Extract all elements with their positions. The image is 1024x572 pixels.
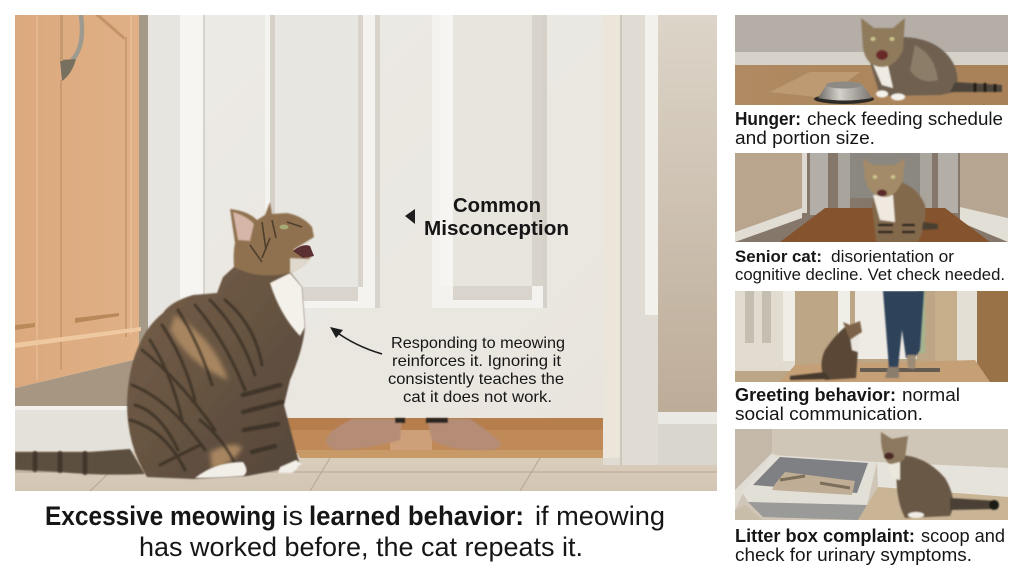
cat ear inner: [233, 212, 254, 241]
caption: senior cat: disorientation or: [831, 247, 954, 266]
cat muzzle: [290, 258, 310, 273]
tile floor: [15, 450, 717, 491]
caption: greeting behavior: social communication.: [735, 404, 923, 424]
caption: senior cat: cognitive decline. Vet check needed.: [735, 265, 1005, 284]
caption: hunger: and portion size.: [735, 128, 875, 148]
right door frame: [603, 15, 658, 465]
heading: common misconception: [425, 198, 568, 239]
bottom takeaway statement: Excessive meowing: [45, 501, 276, 531]
bottom takeaway statement: if meowing: [535, 501, 665, 531]
caption: litter box complaint: scoop and: [921, 526, 1005, 546]
bottom takeaway statement: learned behavior:: [309, 501, 524, 531]
text block: misconception explanation: Responding to meowing: [391, 335, 565, 352]
cat body: [127, 262, 305, 479]
icon: small left-pointing triangle: [405, 209, 415, 224]
door gap and threshold: [286, 418, 612, 458]
panel: litter box photo: [735, 429, 1008, 520]
entryway background: [735, 291, 1008, 382]
caption: greeting behavior: normal: [902, 385, 960, 405]
text block: misconception explanation: reinforces it. Ignoring it: [392, 353, 562, 370]
cat: [861, 18, 1002, 100]
text block: misconception explanation: consistently teaches the: [388, 371, 564, 388]
cat: [863, 158, 938, 242]
cat open mouth: [293, 245, 314, 258]
caption: greeting behavior: Greeting behavior:: [735, 385, 896, 405]
hallway background: [735, 153, 1008, 242]
cat: [790, 321, 862, 380]
panel: greeting behavior photo: [735, 291, 1008, 382]
caption: litter box complaint: Litter box complaint:: [735, 526, 915, 546]
arrow: pointing to cat: [330, 327, 382, 354]
door panel right: [432, 15, 547, 308]
cat head: [230, 202, 314, 275]
person's legs in jeans: [883, 291, 924, 378]
door: [205, 15, 603, 419]
cat white chest: [270, 273, 305, 336]
white door frame left: [148, 15, 205, 330]
cat flank highlight: [170, 315, 242, 470]
cabinet handle: [60, 15, 82, 81]
caption: hunger: [735, 109, 1003, 148]
icon: metal food bowl: [814, 82, 874, 104]
door panel left: [265, 15, 380, 308]
cat: [881, 432, 999, 518]
caption: hunger: Hunger:: [735, 109, 801, 129]
feet under the door: [326, 418, 501, 450]
room background: [735, 429, 1008, 520]
cat eye: [280, 224, 288, 230]
bottom takeaway statement: has worked before, the cat repeats it.: [139, 532, 583, 562]
bottom takeaway statement: is: [282, 501, 303, 531]
room background: [735, 15, 1008, 105]
cat: meowing tabby: [15, 202, 314, 479]
panel: senior cat photo: [735, 153, 1008, 242]
cat white paws: [195, 460, 302, 478]
cat face markings: [250, 220, 302, 262]
bottom takeaway statement: [45, 501, 665, 562]
caption: senior cat: [735, 247, 1005, 284]
caption: litter box complaint: [735, 526, 1005, 565]
caption: greeting behavior: [735, 385, 960, 424]
panel: main photo of cat meowing at door: [15, 15, 717, 491]
caption: senior cat: Senior cat:: [735, 247, 822, 266]
caption: litter box complaint: check for urinary symptoms.: [735, 545, 972, 565]
cat tail: [15, 449, 145, 475]
heading: common misconception: Misconception: [424, 218, 569, 240]
heading: common misconception: Common: [453, 195, 541, 217]
caption: hunger: check feeding schedule: [807, 109, 1003, 129]
text block: misconception explanation: [388, 335, 565, 406]
litter box: [742, 455, 877, 520]
panel: hunger photo: [735, 15, 1008, 105]
right wall and baseboard: [658, 15, 717, 465]
cat stripes: [35, 300, 282, 473]
lower cabinet wall and baseboard: [15, 358, 141, 451]
wooden cabinet: [15, 15, 148, 388]
text block: misconception explanation: cat it does not work.: [403, 389, 552, 406]
